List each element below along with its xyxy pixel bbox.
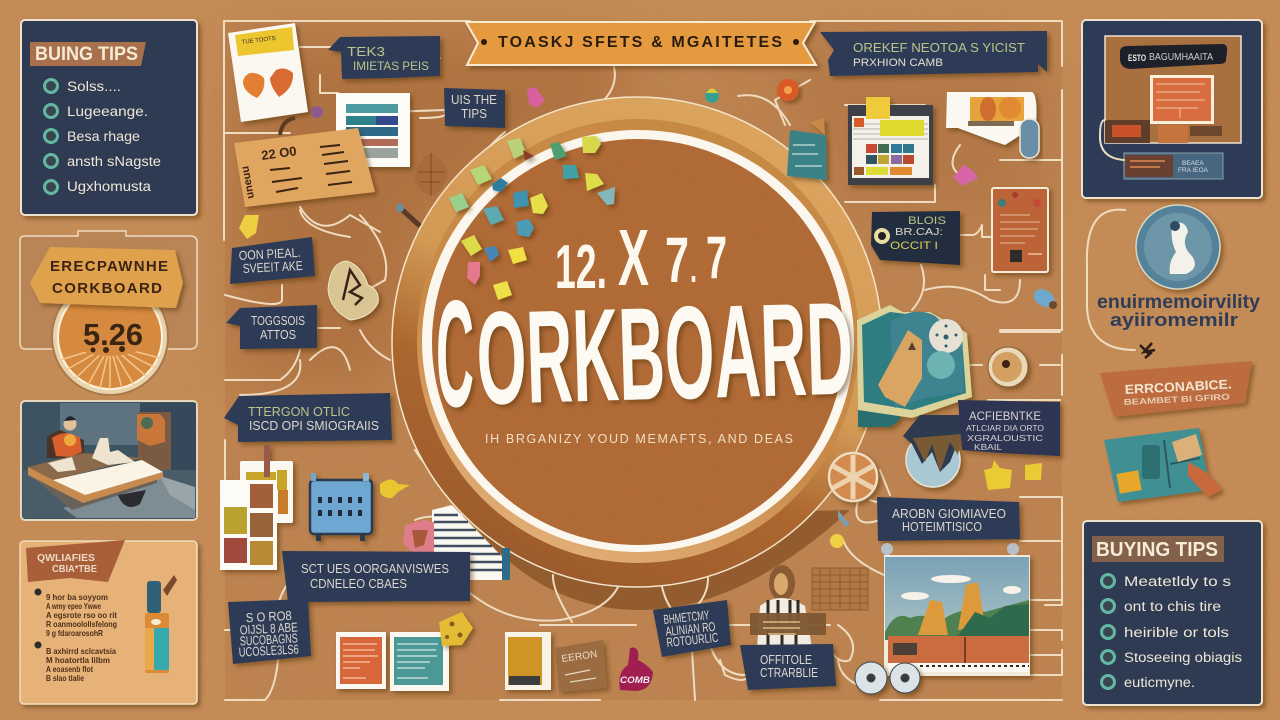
label: arbon [877,497,1020,541]
label: test [328,36,440,79]
bullet list: B slao tlalie [46,673,84,683]
environment heading: ayiiromemilr [1110,310,1238,330]
bullet list: A eoasenb flot [46,664,93,674]
tips list: Meatetldy to s [1124,574,1231,589]
label: bottom tilted [653,600,731,657]
tan note [234,128,375,207]
label: achievement: KBAIL [974,442,1002,452]
icon: purple pin [280,106,323,135]
label: official [740,644,836,690]
size gauge: 5.26 [83,317,143,352]
tips list: Ugxhomusta [67,179,152,194]
label: achievement: ACFIEBNTKE [969,411,1041,423]
white paper with orange picture [946,92,1036,145]
tips list: Solss.... [67,79,121,94]
label: bottom tilted: ALINIAN RO [665,619,716,639]
person [47,416,84,458]
teal map card [1104,428,1222,502]
bullet list: R oanmoolollsfelong [46,619,117,629]
inner shading ring [417,119,859,563]
table [28,438,163,510]
label: achievement [958,400,1060,456]
plate icon [988,347,1028,387]
title dimensions: 7 [706,224,727,291]
bullet list: A egsrote rso oo rit [46,610,117,620]
orange sign: ERECPAWNHE [50,258,168,275]
icon: bottle [145,575,177,673]
label: official: CTRARBLIE [760,665,818,680]
icon: hammer pin [396,204,420,226]
label: small dark note: S O RO8 [245,608,292,625]
label: use the tips: TIPS [461,106,487,121]
yellow sticky notes [984,460,1042,490]
caption strip: FRA IEOA [1178,167,1209,174]
icon: blue pin [1030,286,1058,310]
black label: BAGUMHAAITA [1149,52,1213,63]
orange card [992,188,1048,272]
orange and teal cards [336,632,449,691]
seal icon [1136,205,1220,289]
panel: right top [1082,20,1262,198]
label: official: OFFITOLE [760,652,812,667]
orange sign: CORKBOARD [52,280,162,297]
label: top right [820,31,1047,76]
black label [1120,44,1227,69]
blue bowl with dark leaves [903,415,962,487]
label: storage options: ISCD OPI SMIOGRAIIS [249,418,379,433]
icon: poster pins [881,543,1019,555]
top banner: TOASKJ SFETS & MGAITETES [498,34,782,51]
bullet list: A wmy epeo Ywwe [46,601,101,611]
subtitle: IH BRGANIZY YOUD MEMAFTS, AND DEAS [485,432,793,446]
white ring [422,130,854,552]
tips list: ansth sNagste [67,154,161,169]
icon: orange button [777,79,799,101]
wheel icon [829,453,877,501]
title dimensions: 12. [555,233,607,302]
title dimensions: . [690,247,697,291]
top banner [466,22,816,65]
bullet list: B axhirrd sclcavtsia [46,646,116,656]
orange ribbon [1100,361,1252,417]
wheels [855,662,920,694]
caption strip: BEAEA [1182,160,1204,167]
sticky notes cluster [449,136,615,300]
label: small dark note: SUCOBAGNS [239,630,298,649]
heart tag with letter [328,261,378,320]
document stack [220,445,293,570]
tips list: Stoseeing obiagis [1124,650,1242,665]
label: top right: OREKEF NEOTOA S YICIST [853,40,1025,55]
label: arbon: HOTEIMTISICO [902,519,982,534]
colour bars document [336,93,410,167]
shield poster [857,305,972,427]
title dimensions: 7 [665,224,689,296]
ring shadow [470,510,850,610]
icon: leaf [414,153,448,196]
icon: yellow pin [380,480,410,498]
small pins [830,510,850,548]
label: set up organisers: CDNELEO CBAES [310,576,407,591]
tips list: ont to chis tire [1124,599,1221,614]
orange sign [30,247,183,308]
text: ORKBOARD [475,275,855,432]
calendar panel [848,97,933,185]
label: don plean [230,237,315,284]
label: togethis attos: ATTOS [260,327,296,342]
panel: recommended corkboard size [20,231,197,395]
big circle cork board [392,97,882,587]
title dimensions [555,213,727,302]
environment heading [1097,292,1260,330]
label: togethis attos: TOGGSOIS [251,313,305,328]
title CORKBOARD [436,269,855,439]
label: bottom tilted: ROTOURLIC [666,630,719,650]
label: set up organisers: SCT UES OORGANVISWES [301,561,449,576]
label: achievement: XGRALOUSTIC [967,433,1043,443]
orange ribbon: BEAMBET BI GFIRO [1124,391,1230,407]
label: small dark note: OIJSL 8 ABE [239,619,298,638]
dark label with clock: OCCIT I [890,240,938,252]
panel: desk illustration [21,401,197,520]
label: storage options [224,393,392,442]
tips list: euticmyne. [1124,675,1195,690]
panel: buying tips bottom right [1083,521,1262,705]
size gauge [52,279,168,395]
tips list: heirible or tols [1124,625,1229,640]
connector lines [224,21,1135,700]
bullet list [34,588,117,683]
title CORKBOARD: C [436,269,474,439]
orange and brown notes bottom: EERON [561,649,598,665]
label: storage options: TTERGON OTLIC [248,405,350,419]
label: arbon: AROBN GIOMIAVEO [892,506,1006,521]
ribbon header: CBIA*TBE [52,564,97,575]
bullet list: 9 hor ba soyyom [46,592,108,602]
ribbon header [26,540,125,582]
label: test: IMIETAS PEIS [353,59,429,73]
label: use the tips [444,88,505,128]
bullet list: M hoatortla lilbm [46,655,110,665]
blue machine [310,473,372,541]
label: set up organisers [282,551,470,602]
pink bottle [619,648,653,691]
bullet list: 9 g fdaroarosohR [46,628,103,638]
label: small dark note: UCOSLE3LS6 [238,641,299,660]
title dimensions: X [618,213,649,302]
orange and brown notes bottom [505,632,607,692]
tips list: Lugeeange. [67,104,148,119]
icon: small black burst [1140,343,1155,358]
dark label with clock [871,211,960,265]
dark label with clock: BLOIS [908,215,946,227]
dark label with clock: BR.CAJ: [895,226,943,238]
outer ring [392,97,882,587]
icon: yellow cheese [439,612,473,646]
black label: ESTO [1128,53,1146,63]
icon: pink heart [953,165,978,186]
heading banner: BUYING TIPS [1096,539,1218,561]
panel: buying tips top left [21,20,197,215]
label: top right: PRXHION CAMB [853,57,943,69]
person figure [750,565,826,650]
icon: pink pin [527,87,545,108]
pink bottle: COMB [620,675,650,686]
paper with hearts [228,23,308,122]
label: test: TEK3 [347,44,385,59]
label: achievement: ATLCIAR DIA ORTO [966,423,1044,433]
landscape poster [884,555,1030,676]
paper with hearts: TUE TOOTS [242,36,276,46]
heading banner: BUING TIPS [35,44,138,65]
label: togethis attos [226,305,317,349]
orange ribbon: ERRCONABICE. [1124,376,1232,397]
tips list [44,79,161,194]
central board area [225,21,1062,700]
tan note: uneuu [239,165,257,200]
icon: small pin [705,88,719,103]
wall plaque [137,412,171,470]
ribbon header: QWLIAFIES [37,553,95,564]
label: use the tips: UIS THE [451,92,497,107]
teal torn note [787,118,827,180]
brick pattern [812,568,868,610]
label: don plean: SVEEIT AKE [242,258,303,276]
label: small dark note [228,599,311,664]
tan note: 22 O0 [260,143,297,163]
label: bottom tilted: BHMETCMY [663,607,710,627]
environment heading: enuirmemoirvility [1097,292,1260,313]
cork surface [432,139,844,545]
sticky yellow [239,215,259,239]
tips list: Besa rhage [67,129,140,144]
label: don plean: OON PIEAL. [238,245,301,263]
inner picture [1105,36,1241,143]
tips list [1102,574,1242,690]
icon: blue pill [1020,119,1039,158]
caption strip [1124,153,1223,179]
striped document with flower [403,505,510,580]
panel: notes with bottle [20,540,197,704]
